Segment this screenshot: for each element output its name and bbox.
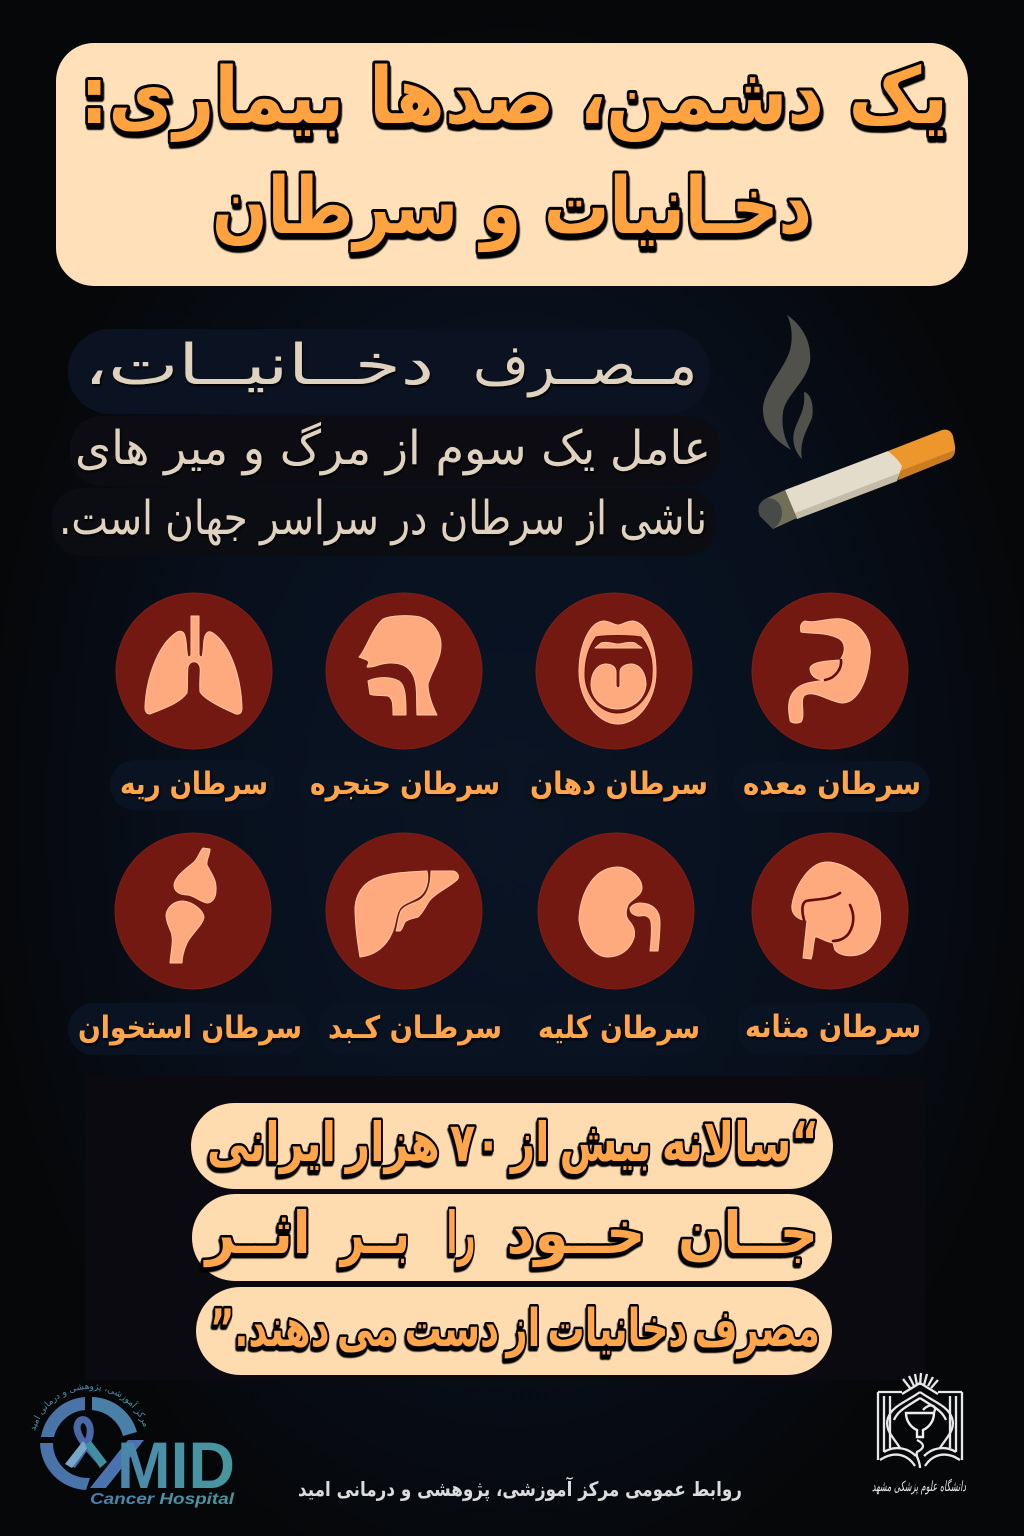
icon: stomach (752, 593, 908, 749)
line 2: عامل یک سوم از مرگ و میر های (75, 421, 711, 476)
icon: bone joint (115, 833, 271, 989)
label (110, 760, 275, 810)
icon: larynx (326, 593, 482, 749)
icon: liver (326, 833, 482, 989)
logo arc text: مرکز آموزشی، پژوهشی و درمانی امید (32, 1384, 146, 1431)
icon: mouth (536, 593, 692, 749)
word 3: را (446, 1199, 476, 1267)
panel: stomach cancer (732, 593, 930, 812)
line 3: ناشی از سرطان در سراسر جهان است. (59, 491, 707, 546)
label (528, 1003, 708, 1055)
text block: tobacco statement (52, 329, 720, 556)
label: سرطان کلیه (538, 1010, 700, 1046)
heading line 2: دخـانیات و سرطان (212, 162, 812, 252)
label: سرطان دهان (530, 766, 708, 802)
label (737, 1003, 930, 1055)
word 5: اثــر (203, 1199, 310, 1268)
label: سرطان معده (743, 766, 921, 802)
word 4: بــر (338, 1199, 410, 1268)
heading line 1: یک دشمن، صدها بیماری: (80, 52, 948, 142)
label: سرطان استخوان (78, 1010, 302, 1046)
logo: Omid Cancer Hospital (32, 1384, 235, 1508)
panel: mouth cancer (522, 593, 718, 810)
quote line 2 (203, 1199, 818, 1268)
label: سرطان حنجره (310, 766, 500, 802)
label: سرطان مثانه (745, 1009, 921, 1045)
panel: title (56, 43, 968, 286)
icon: kidney (538, 833, 694, 989)
panel: bone cancer (68, 833, 308, 1055)
panel: bladder cancer (737, 833, 930, 1055)
line 1 word 1: مــصــرف (473, 333, 697, 398)
label (68, 1003, 308, 1055)
label (732, 761, 930, 812)
panel: larynx cancer (300, 593, 510, 810)
icon: lungs (116, 593, 272, 749)
panel: liver cancer (318, 833, 512, 1055)
callout: mortality quote (191, 1103, 833, 1375)
label: سرطـان کـبد (328, 1010, 502, 1046)
logo: Mashhad University of Medical Sciences (872, 1373, 966, 1495)
icon: cigarette with smoke (759, 315, 955, 529)
footer credit: روابط عمومی مرکز آموزشی، پژوهشی و درمانی امید (298, 1476, 742, 1502)
label: سرطان ریه (120, 766, 268, 802)
icon: bladder (752, 833, 908, 989)
panel: lung cancer (110, 593, 275, 810)
logo wordmark: MID (117, 1428, 235, 1502)
quote line 1: “سالانه بیش از ۷۰ هزار ایرانی (207, 1111, 819, 1174)
panel: kidney cancer (528, 833, 708, 1055)
word 1: جــان (678, 1199, 818, 1267)
line 1 word 2: دخــانیــات، (84, 333, 434, 398)
label (522, 760, 718, 810)
label (318, 1003, 512, 1055)
label (300, 760, 510, 810)
word 2: خــود (506, 1199, 646, 1268)
logo subtitle: Cancer Hospital (90, 1491, 235, 1508)
